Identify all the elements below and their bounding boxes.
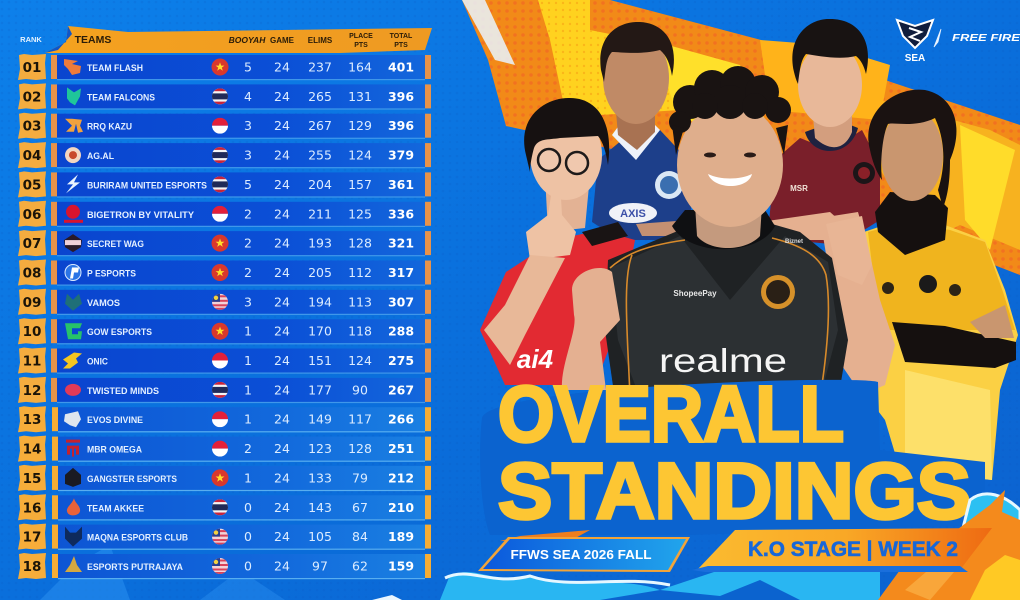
standings row 12: 267 xyxy=(388,382,414,397)
standings row 18: 159 xyxy=(388,558,414,574)
standings row 07: 2 xyxy=(244,236,252,251)
standings row 03: 3 xyxy=(244,118,252,133)
standings row 12: TWISTED MINDS xyxy=(87,386,159,396)
player: back right, maroon jersey: MSR xyxy=(790,184,808,193)
standings row 09: 09 xyxy=(23,295,41,311)
standings row 18: ESPORTS PUTRAJAYA xyxy=(87,562,183,572)
standings row 02: 24 xyxy=(274,89,290,104)
table header xyxy=(20,26,432,53)
standings row 02: 396 xyxy=(388,89,414,104)
player: back left, blue jersey: AXIS xyxy=(620,208,646,220)
standings row 10: 1 xyxy=(244,324,252,339)
standings row 18 xyxy=(18,553,431,579)
standings row 11: 275 xyxy=(388,353,414,368)
standings row 13: 13 xyxy=(23,412,41,428)
standings row 17: MAQNA ESPORTS CLUB xyxy=(87,533,188,543)
player: back left, blue jersey xyxy=(592,22,692,240)
banner behind players xyxy=(462,0,1020,275)
standings row 10: 170 xyxy=(308,324,332,339)
brand logos top right: SEA xyxy=(905,53,925,64)
standings row 17 xyxy=(18,524,431,550)
standings row 04: 124 xyxy=(348,148,372,163)
badge: K.O Stage | Week 2: K.O STAGE | WEEK 2 xyxy=(748,538,958,561)
standings row 16: 16 xyxy=(23,500,41,516)
standings row 06: 24 xyxy=(274,206,290,221)
standings row 16: 210 xyxy=(388,500,414,515)
standings row 05: 5 xyxy=(244,177,252,192)
standings row 03 xyxy=(18,113,431,139)
standings row 13 xyxy=(18,406,431,432)
standings row 09: VAMOS xyxy=(87,298,120,308)
standings row 13: 24 xyxy=(274,412,290,427)
standings row 08: P ESPORTS xyxy=(87,268,136,278)
standings row 17: 17 xyxy=(23,530,41,546)
standings row 14: 251 xyxy=(388,441,414,456)
standings row 14: 123 xyxy=(308,441,332,456)
standings row 02: TEAM FALCONS xyxy=(87,92,155,102)
standings row 16: 24 xyxy=(274,500,290,515)
standings row 18: 24 xyxy=(274,558,290,574)
standings row 09: 3 xyxy=(244,294,252,309)
standings row 04: 255 xyxy=(308,148,332,163)
standings row 14: 24 xyxy=(274,441,290,456)
badge: K.O Stage | Week 2 xyxy=(692,528,992,572)
standings row 17: 105 xyxy=(308,529,332,544)
standings row 10: 24 xyxy=(274,324,290,339)
standings row 07 xyxy=(18,230,431,256)
standings row 06: 06 xyxy=(23,207,41,223)
standings row 01 xyxy=(18,54,431,80)
standings row 12 xyxy=(18,377,431,403)
table header: PLACE xyxy=(349,33,373,40)
standings row 14 xyxy=(18,436,431,462)
standings row 18: 0 xyxy=(244,558,252,574)
standings row 06: 336 xyxy=(388,206,414,221)
standings row 15 xyxy=(18,465,431,491)
player: back right, maroon jersey xyxy=(768,19,880,245)
standings row 11: 151 xyxy=(308,353,332,368)
standings row 16: 143 xyxy=(308,500,332,515)
table header: TEAMS xyxy=(75,34,111,46)
standings row 15: 212 xyxy=(388,470,414,485)
standings row 14: MBR OMEGA xyxy=(87,445,142,455)
standings row 11 xyxy=(18,348,431,374)
table header: GAME xyxy=(270,36,295,45)
standings row 09 xyxy=(18,289,431,315)
standings row 08: 08 xyxy=(23,266,41,282)
standings row 15: 133 xyxy=(308,470,332,485)
standings row 12: 24 xyxy=(274,382,290,397)
standings row 17: 84 xyxy=(352,529,368,544)
table header: PTS xyxy=(354,42,368,49)
standings row 03: 03 xyxy=(23,119,41,135)
standings row 13: 117 xyxy=(348,412,372,427)
standings row 08: 205 xyxy=(308,265,332,280)
standings row 03: 267 xyxy=(308,118,332,133)
standings row 17: 24 xyxy=(274,529,290,544)
badge: FFWS SEA 2026 Fall xyxy=(478,530,690,572)
player: centre, black jersey: Biznet xyxy=(785,239,803,245)
standings row 09: 194 xyxy=(308,294,332,309)
standings row 11: 124 xyxy=(348,353,372,368)
standings row 03: 24 xyxy=(274,118,290,133)
player: centre, black jersey: ShopeePay xyxy=(673,289,717,298)
standings row 05: 157 xyxy=(348,177,372,192)
standings row 14: 14 xyxy=(23,442,41,458)
standings row 07: SECRET WAG xyxy=(87,239,144,249)
standings row 03: RRQ KAZU xyxy=(87,122,132,132)
standings row 15: 24 xyxy=(274,470,290,485)
standings row 18: 62 xyxy=(352,558,368,574)
standings row 05: BURIRAM UNITED ESPORTS xyxy=(87,180,207,190)
standings row 11: 24 xyxy=(274,353,290,368)
standings row 07: 128 xyxy=(348,236,372,251)
standings row 12: 1 xyxy=(244,382,252,397)
standings row 18: 18 xyxy=(23,559,41,575)
standings row 10: 118 xyxy=(348,324,372,339)
player: left, red jersey with glasses xyxy=(480,98,635,385)
standings row 02 xyxy=(18,83,431,110)
standings row 07: 24 xyxy=(274,236,290,251)
brand logos top right xyxy=(897,20,1020,64)
standings row 03: 129 xyxy=(348,118,372,133)
brand logos top right: FREE FIRE xyxy=(952,32,1020,44)
standings row 12: 12 xyxy=(23,383,41,399)
waves bottom xyxy=(440,494,1020,600)
standings row 10 xyxy=(18,318,431,344)
table header: BOOYAH xyxy=(229,35,266,45)
standings row 02: 4 xyxy=(244,89,252,104)
player: right, yellow jersey xyxy=(862,90,1018,480)
title: overall standings: OVERALL xyxy=(498,369,844,458)
standings row 16: 0 xyxy=(244,500,252,515)
standings row 01: TEAM FLASH xyxy=(87,63,143,73)
standings row 11: ONIC xyxy=(87,356,108,366)
standings row 04: 04 xyxy=(23,148,41,164)
standings row 07: 321 xyxy=(388,236,414,251)
standings row 02: 265 xyxy=(308,89,332,104)
standings row 08: 2 xyxy=(244,265,252,280)
badge: FFWS SEA 2026 Fall: FFWS SEA 2026 FALL xyxy=(510,547,652,562)
standings row 17: 0 xyxy=(244,529,252,544)
standings row 04 xyxy=(18,142,431,168)
player: centre, black jersey xyxy=(562,66,895,400)
standings row 01: 164 xyxy=(348,60,372,74)
standings row 12: 90 xyxy=(352,382,368,397)
standings row 16: 67 xyxy=(352,500,368,515)
standings row 01: 5 xyxy=(244,60,252,74)
standings row 08: 112 xyxy=(348,265,372,280)
standings row 05: 204 xyxy=(308,177,332,192)
table header: RANK xyxy=(20,35,42,44)
standings row 10: 10 xyxy=(23,324,41,340)
standings row 06 xyxy=(18,201,431,227)
standings row 08: 317 xyxy=(388,265,414,280)
standings row 15: 1 xyxy=(244,470,252,485)
standings row 05: 361 xyxy=(388,177,414,192)
player: centre, black jersey: realme xyxy=(659,342,787,379)
standings row 03: 396 xyxy=(388,118,414,133)
standings row 08: 24 xyxy=(274,265,290,280)
standings row 06: 125 xyxy=(348,206,372,221)
table header: PTS xyxy=(394,42,408,49)
standings row 01: 24 xyxy=(274,60,290,74)
standings row 13: EVOS DIVINE xyxy=(87,415,143,425)
standings row 07: 193 xyxy=(308,236,332,251)
standings row 15: GANGSTER ESPORTS xyxy=(87,474,177,484)
standings row 04: AG.AL xyxy=(87,151,114,161)
standings row 07: 07 xyxy=(23,236,41,252)
standings row 05: 24 xyxy=(274,177,290,192)
standings row 02: 131 xyxy=(348,89,372,104)
standings row 10: GOW ESPORTS xyxy=(87,327,152,337)
standings row 04: 24 xyxy=(274,148,290,163)
standings row 09: 24 xyxy=(274,294,290,309)
standings row 09: 113 xyxy=(348,294,372,309)
standings row 14: 128 xyxy=(348,441,372,456)
standings row 04: 3 xyxy=(244,148,252,163)
table header: ELIMS xyxy=(308,36,333,45)
title: overall standings xyxy=(498,369,971,535)
standings row 11: 1 xyxy=(244,353,252,368)
standings row 08 xyxy=(18,260,431,286)
standings row 17: 189 xyxy=(388,529,414,544)
standings row 01: 401 xyxy=(388,60,414,74)
title panel backdrop xyxy=(480,380,985,535)
flame bottom right xyxy=(878,490,1020,600)
standings row 06: 2 xyxy=(244,206,252,221)
standings row 14: 2 xyxy=(244,441,252,456)
standings row 16 xyxy=(18,494,431,520)
standings row 06: 211 xyxy=(308,206,332,221)
standings row 05: 05 xyxy=(23,177,41,193)
standings row 12: 177 xyxy=(308,382,332,397)
standings row 11: 11 xyxy=(23,354,41,370)
table header: TOTAL xyxy=(390,33,413,40)
standings row 04: 379 xyxy=(388,148,414,163)
standings row 09: 307 xyxy=(388,294,414,309)
standings row 10: 288 xyxy=(388,324,414,339)
standings row 01: 01 xyxy=(23,60,41,76)
standings row 01: 237 xyxy=(308,60,332,74)
standings row 05 xyxy=(18,171,431,198)
standings row 15: 15 xyxy=(23,471,41,487)
player: left, red jersey with glasses: ai4 xyxy=(517,344,554,374)
title: overall standings: STANDINGS xyxy=(498,446,971,535)
standings row 15: 79 xyxy=(352,470,368,485)
standings row 13: 1 xyxy=(244,412,252,427)
standings row 06: BIGETRON BY VITALITY xyxy=(87,210,194,220)
standings row 18: 97 xyxy=(312,558,328,574)
standings row 13: 149 xyxy=(308,412,332,427)
standings row 13: 266 xyxy=(388,412,414,427)
standings row 16: TEAM AKKEE xyxy=(87,503,144,513)
standings row 02: 02 xyxy=(23,89,41,105)
